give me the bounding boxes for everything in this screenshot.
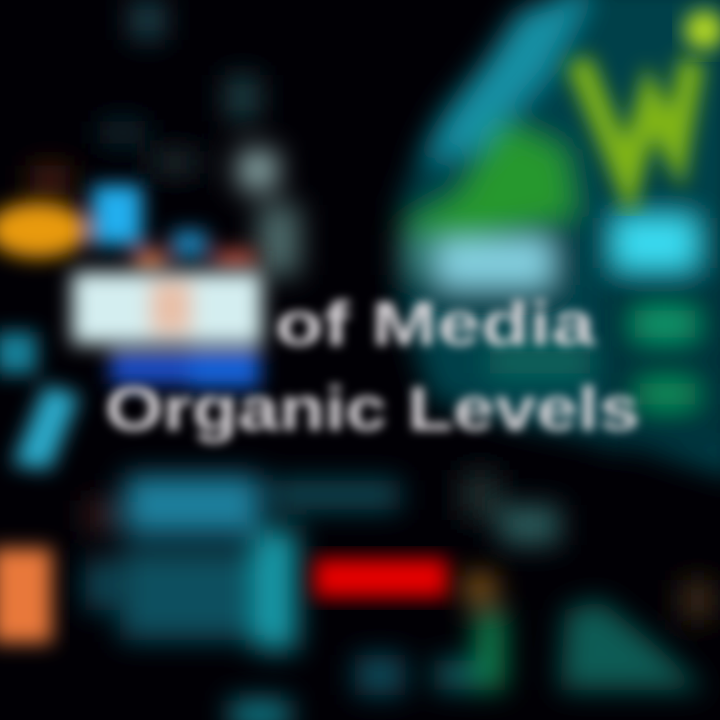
chart: lower teal blocks (85, 470, 560, 650)
panel: title highlight box (72, 272, 262, 388)
panel: faint dotted top column (30, 0, 300, 275)
icon: lime chart end dot (684, 10, 720, 50)
icon: orange block (0, 548, 52, 643)
panel: left header icons (0, 185, 255, 270)
chart: lower right bars (230, 575, 715, 720)
panel: globe with growth chart (395, 0, 720, 480)
chart line: lime growth zigzag (578, 60, 692, 180)
title: of Media (275, 290, 596, 359)
title (105, 290, 640, 444)
title: Organic Levels (105, 375, 640, 444)
bar: red highlight (314, 558, 448, 598)
panel: left cyan marks (0, 332, 80, 470)
